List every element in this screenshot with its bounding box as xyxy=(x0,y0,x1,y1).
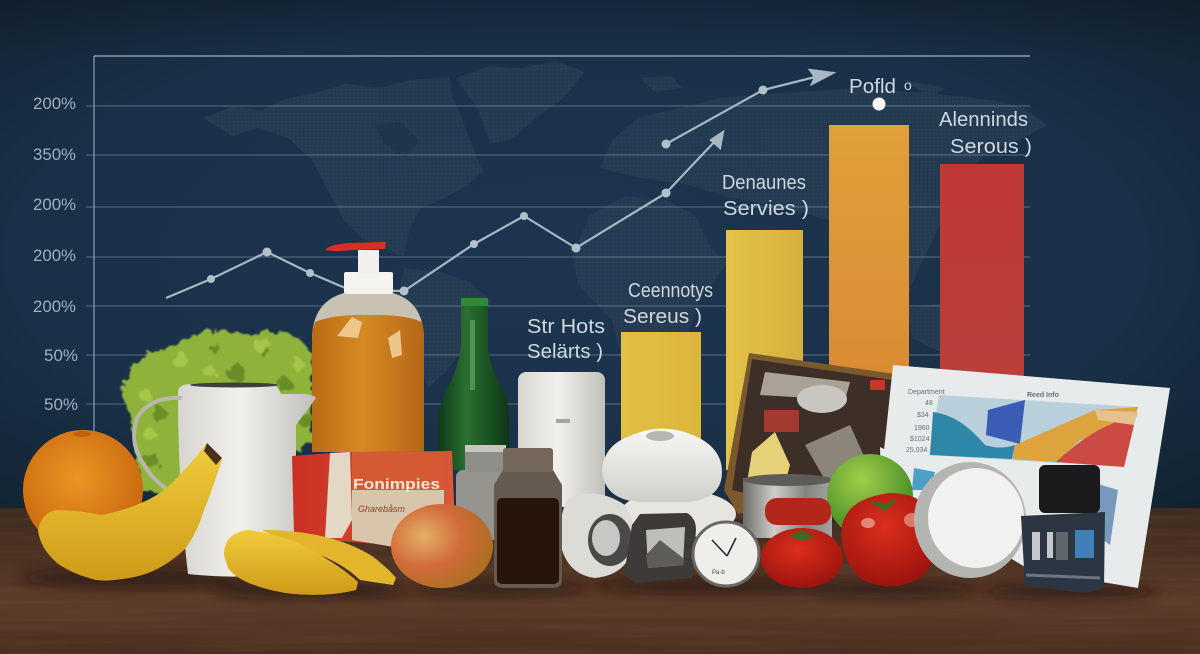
y axis labels: 50% xyxy=(44,346,78,365)
white container xyxy=(518,372,605,507)
report: 25,034 xyxy=(906,447,928,454)
bar labels: o xyxy=(904,77,912,93)
background wall xyxy=(0,0,1200,512)
y axis labels: 200% xyxy=(33,246,76,265)
book xyxy=(724,353,895,514)
y axis labels: 200% xyxy=(33,297,76,316)
bar labels: Sereus ) xyxy=(623,306,702,328)
lettuce xyxy=(122,329,312,500)
pressure gauge: Pa·b xyxy=(712,570,725,576)
bar labels xyxy=(527,76,1032,363)
big tomato xyxy=(841,493,938,586)
bar labels: Denaunes xyxy=(722,172,806,194)
item shadows xyxy=(20,568,1160,600)
photo frame gadget xyxy=(624,513,696,583)
salt jar xyxy=(456,445,508,540)
world map xyxy=(203,61,1047,392)
y axis labels: 200% xyxy=(33,195,76,214)
green bottle xyxy=(438,298,509,470)
red handle xyxy=(765,498,831,525)
pressure gauge xyxy=(693,522,759,586)
apple xyxy=(827,454,913,538)
bar labels: Ceennotys xyxy=(628,280,713,302)
white lid xyxy=(914,462,1026,578)
bar labels: Servies ) xyxy=(723,198,809,220)
bar labels: Pofld xyxy=(849,76,896,98)
ink bottle xyxy=(1021,465,1105,593)
tin can xyxy=(743,474,833,538)
bar labels: Alenninds xyxy=(939,109,1028,131)
report: Department xyxy=(908,389,945,396)
amber pump bottle xyxy=(312,242,424,452)
red package xyxy=(292,451,455,548)
bar labels: Str Hots xyxy=(527,316,605,338)
hudson bay xyxy=(375,122,420,158)
small tomato xyxy=(761,528,843,588)
red package: Gharebåsm xyxy=(358,504,406,514)
orange xyxy=(23,430,143,550)
y axis labels: 350% xyxy=(33,145,76,164)
white dome device xyxy=(602,428,736,538)
bar chart xyxy=(621,125,1024,470)
white jug xyxy=(134,382,316,577)
table xyxy=(0,508,1200,654)
report: Reed Info xyxy=(1027,392,1059,399)
banana left xyxy=(38,443,222,581)
bananas center xyxy=(224,530,396,595)
red package: Fonimpies xyxy=(353,476,440,493)
report xyxy=(880,365,1170,588)
bar labels: Serous ) xyxy=(950,136,1032,158)
chart axes and gridlines xyxy=(86,56,1030,432)
report: 1960 xyxy=(914,425,930,432)
report: 48 xyxy=(925,400,933,407)
report: $1024 xyxy=(910,436,930,443)
bar labels: Selärts ) xyxy=(527,341,603,363)
line chart xyxy=(166,70,833,298)
y axis labels: 200% xyxy=(33,94,76,113)
y axis labels xyxy=(33,94,78,414)
dark jar xyxy=(494,448,562,588)
mango xyxy=(391,504,493,588)
report: $34 xyxy=(917,412,929,419)
y axis labels: 50% xyxy=(44,395,78,414)
white gadget xyxy=(562,493,634,578)
